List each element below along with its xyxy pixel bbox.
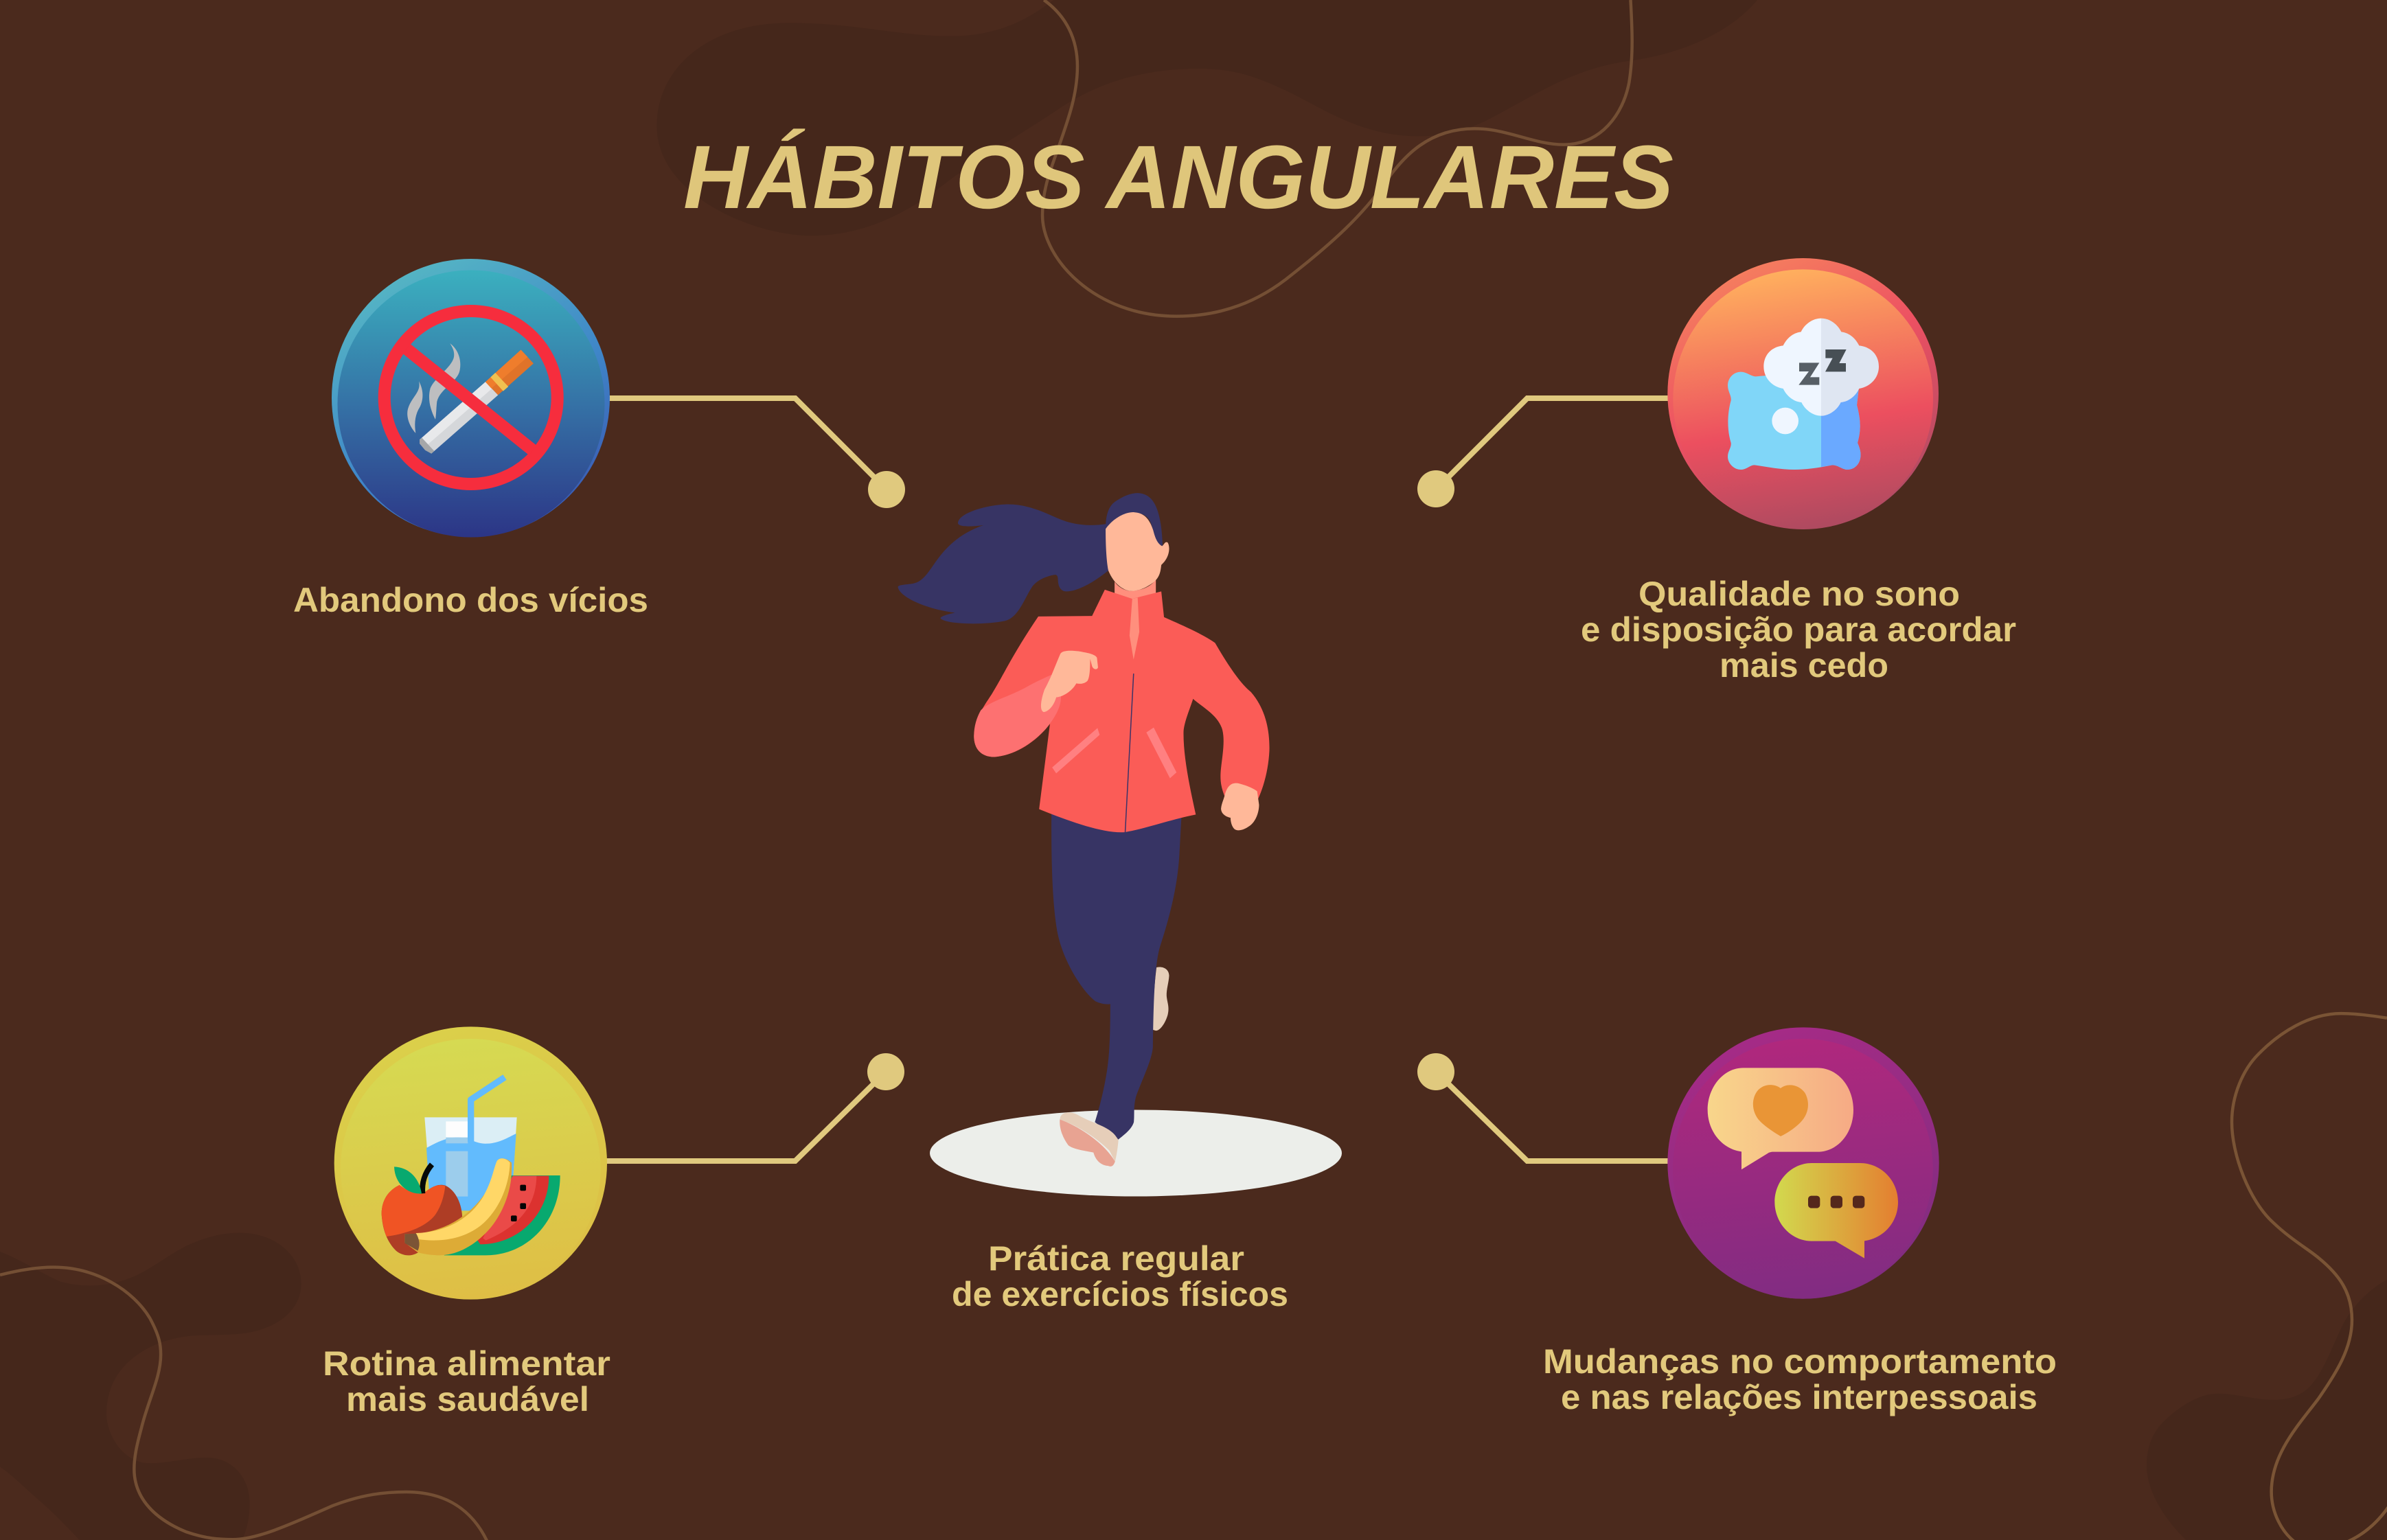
legs: [1051, 814, 1181, 1167]
connector: bottom left: [601, 1053, 904, 1161]
label: mudancas no comportamento: Mudanças no comportamento: [1543, 1342, 2057, 1381]
icon: food and water: [334, 1026, 607, 1300]
connector: bottom right: [1417, 1053, 1676, 1161]
label: rotina alimentar: mais saudável: [346, 1380, 589, 1418]
label: pratica regular: [952, 1239, 1288, 1313]
ground shadow: [930, 1110, 1342, 1196]
figure: running woman: [898, 493, 1270, 1167]
label: rotina alimentar: [323, 1344, 610, 1418]
label: qualidade no sono: e disposição para acordar: [1581, 610, 2016, 649]
upper body: [898, 493, 1270, 832]
label: qualidade no sono: Qualidade no sono: [1638, 575, 1960, 613]
label: pratica regular: de exercícios físicos: [952, 1275, 1288, 1313]
title: HÁBITOS ANGULARES: [683, 126, 1674, 227]
label: abandono: Abandono dos vícios: [293, 581, 648, 619]
label: qualidade no sono: mais cedo: [1720, 646, 1888, 685]
label: pratica regular: Prática regular: [988, 1239, 1244, 1278]
label: rotina alimentar: Rotina alimentar: [323, 1344, 610, 1383]
connector: top right: [1417, 398, 1676, 507]
connector: top left: [604, 398, 905, 508]
icon: pillow and sleep: [1667, 258, 1939, 529]
icon: no smoking: [332, 259, 610, 537]
label: mudancas no comportamento: e nas relações interpessoais: [1561, 1378, 2037, 1416]
icon: speech bubbles: [1667, 1027, 1939, 1299]
label: mudancas no comportamento: [1543, 1342, 2057, 1416]
label: qualidade no sono: [1581, 575, 2016, 685]
